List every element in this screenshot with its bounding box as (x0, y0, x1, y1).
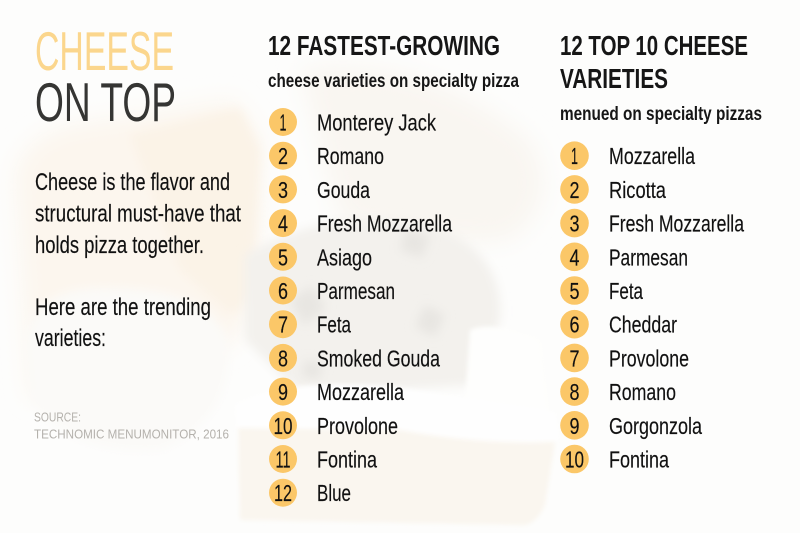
list: top 10 cheeses: Fresh Mozzarella (609, 211, 744, 237)
list: fastest-growing cheeses: Provolone (317, 413, 398, 439)
list: fastest-growing cheeses: 6 (278, 278, 288, 304)
list: fastest-growing cheeses: Romano (317, 143, 384, 169)
source note: TECHNOMIC MENUMONITOR, 2016 (34, 426, 229, 442)
list: fastest-growing cheeses (269, 108, 452, 507)
list: top 10 cheeses: Parmesan (609, 244, 688, 270)
heading: fastest-growing: cheese varieties on specialty pizza (268, 71, 519, 92)
list: top 10 cheeses: Fontina (609, 446, 669, 472)
heading: fastest-growing: 12 FASTEST-GROWING (268, 30, 500, 61)
list: fastest-growing cheeses: Fresh Mozzarella (317, 211, 452, 237)
list: fastest-growing cheeses: 12 (274, 480, 292, 506)
list: top 10 cheeses: 2 (570, 177, 580, 203)
source note: SOURCE: (34, 410, 81, 424)
intro text (35, 169, 241, 259)
list: fastest-growing cheeses: Fontina (317, 446, 377, 472)
heading: top 10: VARIETIES (560, 63, 668, 94)
list: fastest-growing cheeses: Gouda (317, 177, 370, 203)
list: fastest-growing cheeses: Smoked Gouda (317, 345, 440, 371)
list: top 10 cheeses: 1 (571, 143, 578, 169)
list: fastest-growing cheeses: Parmesan (317, 278, 395, 304)
intro text: Cheese is the flavor and (35, 169, 230, 196)
list: fastest-growing cheeses: Monterey Jack (317, 110, 436, 136)
list: fastest-growing cheeses: 8 (278, 345, 288, 371)
list: fastest-growing cheeses: 3 (278, 177, 288, 203)
list: top 10 cheeses: Ricotta (609, 177, 666, 203)
heading: top 10 (560, 30, 762, 125)
trending text (35, 294, 211, 352)
list: fastest-growing cheeses: 4 (278, 211, 288, 237)
list: fastest-growing cheeses: 10 (274, 413, 292, 439)
list: fastest-growing cheeses: 1 (280, 110, 286, 136)
list: top 10 cheeses: 10 (565, 446, 584, 472)
list: fastest-growing cheeses: 5 (278, 244, 288, 270)
list: top 10 cheeses: Mozzarella (609, 143, 695, 169)
heading: fastest-growing (268, 30, 519, 92)
list: top 10 cheeses (560, 141, 744, 473)
title: ON TOP (35, 71, 176, 133)
list: top 10 cheeses: 3 (570, 211, 580, 237)
list: fastest-growing cheeses: Mozzarella (317, 379, 404, 405)
list: fastest-growing cheeses: 11 (276, 446, 290, 472)
title (35, 20, 176, 133)
title: CHEESE (35, 20, 174, 82)
list: top 10 cheeses: 6 (570, 312, 580, 338)
list: top 10 cheeses: Feta (609, 278, 643, 304)
list: top 10 cheeses: 5 (570, 278, 580, 304)
list: top 10 cheeses: Gorgonzola (609, 413, 702, 439)
list: fastest-growing cheeses: 9 (278, 379, 288, 405)
list: fastest-growing cheeses: Feta (317, 312, 351, 338)
source note (34, 410, 229, 442)
list: top 10 cheeses: 9 (570, 413, 580, 439)
list: top 10 cheeses: Provolone (609, 345, 689, 371)
list: top 10 cheeses: 8 (570, 379, 580, 405)
list: fastest-growing cheeses: Asiago (317, 244, 372, 270)
list: top 10 cheeses: Romano (609, 379, 676, 405)
intro text: holds pizza together. (35, 232, 204, 259)
list: fastest-growing cheeses: 7 (278, 312, 288, 338)
list: top 10 cheeses: 4 (570, 244, 580, 270)
trending text: varieties: (35, 325, 106, 352)
list: fastest-growing cheeses: Blue (317, 480, 351, 506)
trending text: Here are the trending (35, 294, 211, 321)
list: top 10 cheeses: 7 (570, 345, 580, 371)
list: top 10 cheeses: Cheddar (609, 312, 677, 338)
list: fastest-growing cheeses: 2 (278, 143, 288, 169)
intro text: structural must-have that (35, 200, 241, 228)
